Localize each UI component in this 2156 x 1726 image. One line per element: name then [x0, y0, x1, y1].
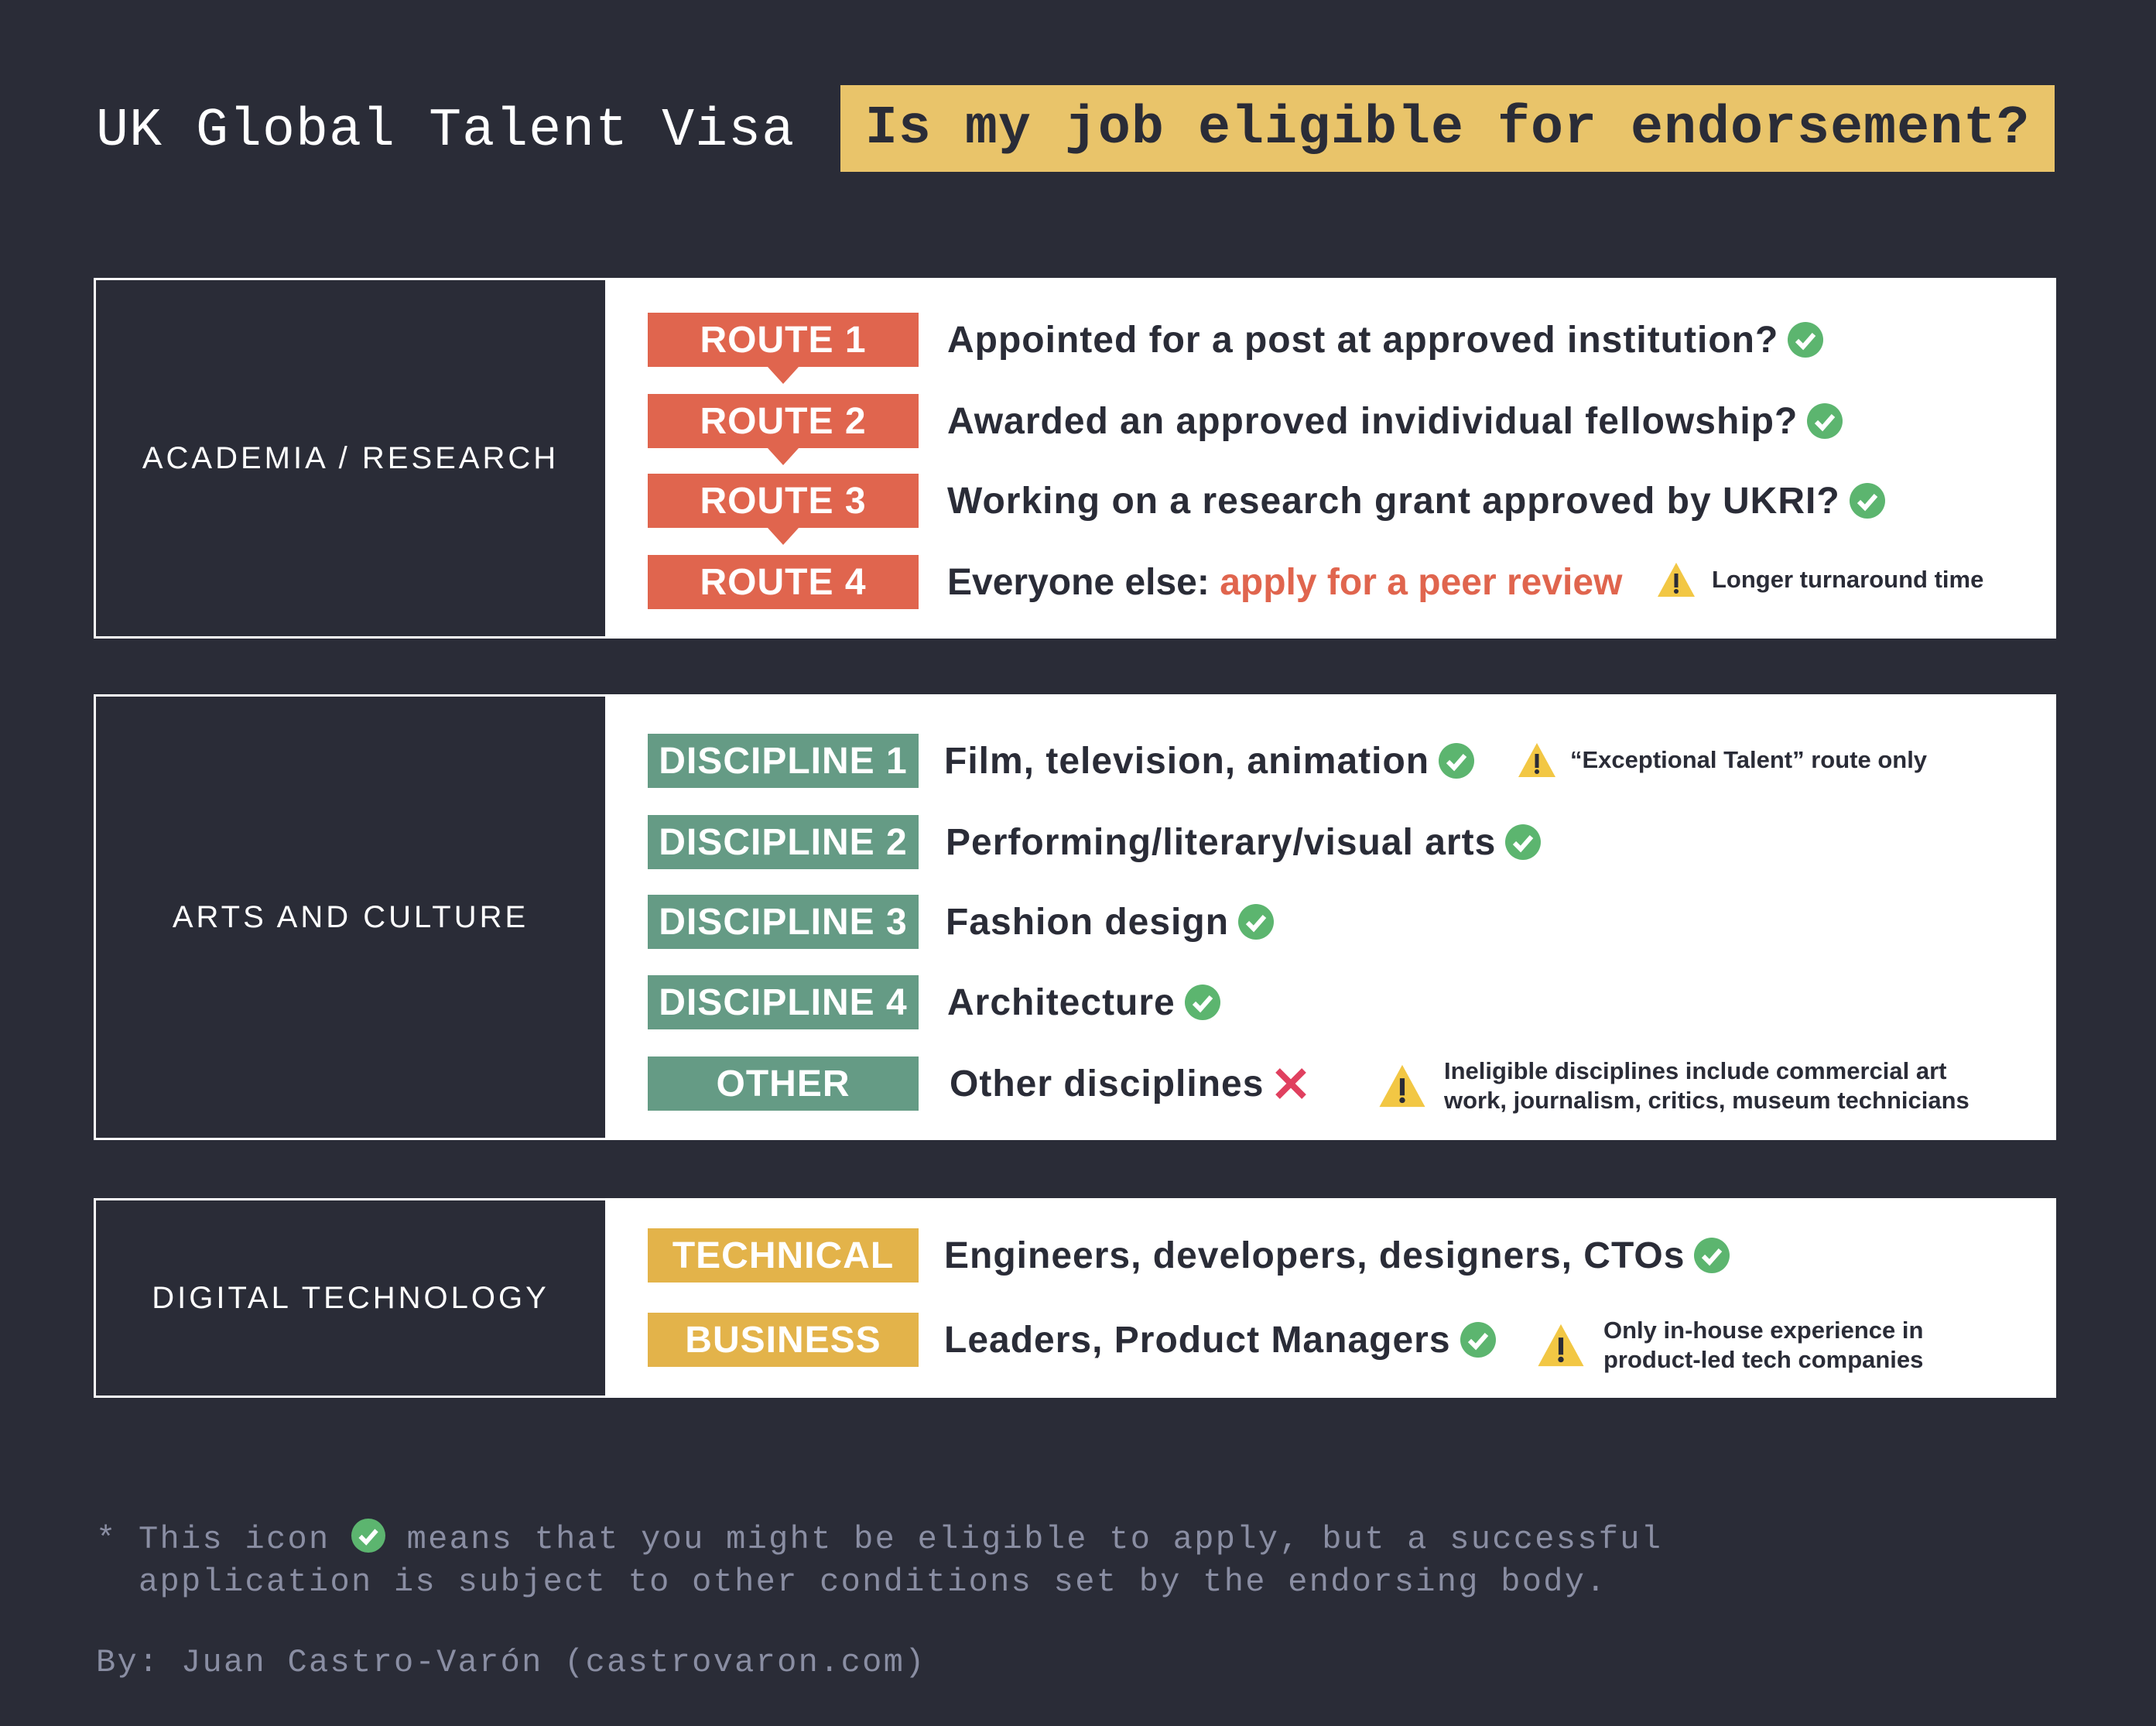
warning: ineligible disciplines — [1379, 1057, 1969, 1114]
discipline 4 row — [648, 975, 1220, 1029]
route 1 row — [648, 313, 1823, 384]
route 2 row: ROUTE 2 — [700, 401, 867, 441]
title: UK Global Talent Visa — [96, 101, 795, 162]
label: arts: ARTS AND CULTURE — [173, 899, 529, 933]
warning: in-house experience: product-led tech companies — [1603, 1346, 1923, 1373]
panel: academia — [94, 278, 2056, 639]
warning: in-house experience: Only in-house experience in — [1603, 1317, 1923, 1344]
business row: Leaders, Product Managers — [944, 1319, 1451, 1361]
route 3 row: Working on a research grant approved by UKRI? — [947, 480, 1840, 522]
other row: Other disciplines — [950, 1063, 1264, 1104]
discipline 1 row: DISCIPLINE 1 — [659, 740, 908, 782]
technical row — [648, 1228, 1730, 1283]
warning: longer turnaround — [1658, 563, 1983, 597]
route 4 row: apply for a peer review — [1220, 562, 1622, 602]
label: academia — [96, 280, 605, 636]
credit: By: Juan Castro-Varón (castrovaron.com) — [96, 1644, 926, 1681]
discipline 2 row — [648, 815, 1541, 869]
discipline 2 row: DISCIPLINE 2 — [659, 822, 908, 862]
warning: exceptional talent — [1518, 743, 1927, 777]
other row: OTHER — [717, 1063, 850, 1104]
warning: exceptional talent: “Exceptional Talent” route only — [1570, 746, 1927, 773]
discipline 3 row — [648, 895, 1274, 949]
panel: digital — [94, 1198, 2056, 1398]
route 2 row: Awarded an approved invidividual fellowship? — [947, 401, 1798, 441]
route 4 row: ROUTE 4 — [700, 562, 867, 602]
warning: ineligible disciplines: work, journalism, critics, museum technicians — [1444, 1087, 1969, 1114]
panel: arts — [94, 694, 2056, 1140]
business row — [648, 1313, 1496, 1367]
warning: ineligible disciplines: Ineligible disciplines include commercial art — [1444, 1057, 1947, 1084]
discipline 3 row: DISCIPLINE 3 — [659, 901, 908, 943]
discipline 1 row — [648, 734, 1474, 788]
route 1 row: Appointed for a post at approved institution? — [947, 319, 1778, 361]
label: academia: ACADEMIA / RESEARCH — [142, 441, 559, 475]
technical row: Engineers, developers, designers, CTOs — [944, 1235, 1685, 1276]
label: digital — [96, 1200, 605, 1396]
route 4 row: Everyone else: — [947, 562, 1210, 602]
route 3 row: ROUTE 3 — [700, 480, 867, 522]
discipline 4 row: DISCIPLINE 4 — [659, 981, 908, 1023]
discipline 1 row: Film, television, animation — [944, 740, 1429, 782]
warning: longer turnaround: Longer turnaround time — [1712, 566, 1983, 593]
title highlight box — [840, 85, 2055, 172]
label: digital: DIGITAL TECHNOLOGY — [152, 1280, 549, 1314]
footnote: * This icon means that you might be eligible to apply, but a successful application is subject to other conditions set by the endorsing body. — [96, 1521, 1662, 1601]
route 4 row — [648, 555, 1622, 609]
route 1 row: ROUTE 1 — [700, 319, 867, 361]
business row: BUSINESS — [685, 1319, 881, 1361]
warning: in-house experience — [1538, 1317, 1923, 1373]
label: arts — [96, 697, 605, 1138]
discipline 4 row: Architecture — [947, 981, 1176, 1023]
technical row: TECHNICAL — [672, 1235, 894, 1276]
title highlight box: Is my job eligible for endorsement? — [865, 98, 2030, 159]
route 3 row — [648, 474, 1885, 545]
discipline 3 row: Fashion design — [946, 901, 1229, 943]
route 2 row — [648, 394, 1843, 465]
discipline 2 row: Performing/literary/visual arts — [946, 822, 1496, 862]
other row — [648, 1056, 1306, 1111]
